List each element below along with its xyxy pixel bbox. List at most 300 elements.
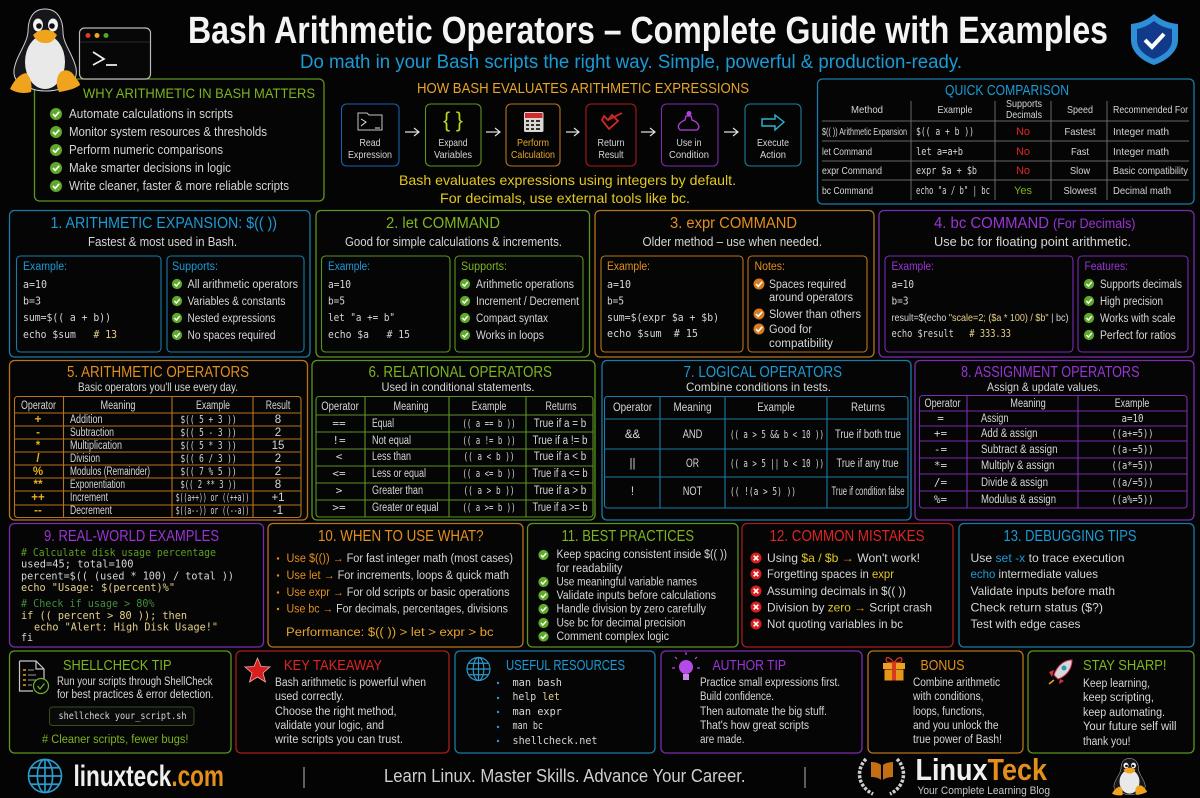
example box [322,256,450,352]
relational table: True if a <= b [532,468,588,480]
operators table: $(( 5 * 3 )) [180,439,236,452]
note: # Cleaner scripts, fewer bugs! [42,734,188,746]
operators table: - [36,427,40,439]
example box: let "a += b" [328,311,395,324]
brand tagline: Your Complete Learning Blog [918,785,1050,797]
step: execute action: Action [760,149,786,161]
supports box: No spaces required [188,330,276,342]
icon: checklist document [20,661,48,694]
operators table: 2 [275,427,281,439]
panel: 13 debugging tips [959,524,1194,647]
description [1083,678,1176,748]
heading: 6. RELATIONAL OPERATORS [368,364,552,381]
comparison table: Fast [1071,146,1089,158]
example box: b=5 [607,294,624,308]
example box: Example: [328,261,370,273]
mistakes list: Forgetting spaces in expr [767,567,894,581]
icon: footer globe [28,760,62,792]
checklist: Use bc for decimal precision [556,618,686,630]
subheading: Basic operators you'll use every day. [78,380,238,394]
heading: KEY TAKEAWAY [284,658,382,674]
description: Your future self will [1083,721,1176,733]
assignment table: Add & assign [981,428,1038,440]
notes box: around operators [769,292,853,304]
checklist [538,549,727,643]
tips list [970,551,1124,631]
example box: b=3 [892,294,908,308]
icon: footer penguin [1112,758,1147,795]
logical table: Example [757,402,795,414]
resource list [497,676,598,747]
supports box: Nested expressions [188,313,276,325]
example box: a=10 [328,278,351,291]
resource list: man bc [512,719,543,732]
features box: Supports decimals [1100,279,1182,291]
icon: gift [883,658,905,680]
comparison table: Integer math [1113,126,1169,138]
notes box: Notes: [754,261,785,273]
tips list: echo intermediate values [970,567,1098,581]
panel: 12 common mistakes [742,524,953,647]
logical table: True if condition false [832,486,904,498]
comparison table: No [1016,165,1030,177]
heading: 7. LOGICAL OPERATORS [684,364,842,381]
icon: terminal window [80,28,150,79]
example box [16,256,161,352]
code block: echo "Usage: $(percent)%" [21,581,175,594]
features box: High precision [1100,296,1163,308]
comparison table: Fastest [1064,126,1096,138]
checklist: Monitor system resources & thresholds [69,124,267,139]
example box: a=10 [23,278,47,291]
list [277,553,513,616]
comparison table: let a=a+b [916,146,963,158]
heading: 11. BEST PRACTICES [562,528,694,545]
description: for best practices & error detection. [57,689,214,701]
code block: used=45; total=100 [21,558,134,570]
heading: AUTHOR TIP [712,658,786,674]
heading: 4. bc COMMAND [934,215,1049,232]
relational table: True if a != b [532,435,588,447]
checklist: Make smarter decisions in logic [69,160,231,175]
relational table: True if a >= b [532,502,588,514]
icon: book and laurel [860,759,903,794]
logical table: (( !(a > 5) )) [730,485,796,498]
icon: linux penguin [10,9,80,93]
step: return result [586,104,636,166]
heading: 1. ARITHMETIC EXPANSION: $(( )) [50,215,277,232]
assignment table: Multiply & assign [981,460,1054,472]
heading: 5. ARITHMETIC OPERATORS [67,364,249,381]
note: For decimals, use external tools like bc. [440,190,690,206]
subheading: Assign & update values. [987,380,1101,394]
description [700,677,840,746]
description: validate your logic, and [275,720,384,732]
assignment table: *= [934,459,947,472]
comparison table: Supports [1006,98,1042,110]
checklist: Perform numeric comparisons [69,142,223,157]
relational table: Greater than [372,485,423,497]
brand name: LinuxTeck [916,752,1048,787]
example box: b=3 [23,294,41,308]
example box: b=5 [328,294,345,308]
checklist: Comment complex logic [556,631,669,643]
panel: why arithmetic matters [34,79,324,201]
assignment table: a=10 [1122,412,1144,425]
relational table: Less than [372,451,411,463]
comparison table: Decimal math [1113,185,1171,197]
comparison table: Speed [1067,104,1093,116]
mistakes list: Using $a / $b → Won't work! [767,551,920,565]
checklist [50,106,289,193]
operators table: $(( 2 ** 3 )) [180,478,236,491]
assignment table: /= [934,476,947,489]
example box: echo $result # 333.33 [892,327,1011,340]
assignment table: ((a-=5)) [1112,443,1154,456]
heading: WHY ARITHMETIC IN BASH MATTERS [83,85,315,101]
tips list: Test with edge cases [970,617,1080,631]
panel: 4 bc command [879,210,1194,357]
operators table: 2 [275,466,281,478]
step: return result: Return [598,137,625,149]
mistakes list [750,551,932,631]
assignment table: Operator [924,398,961,410]
checklist: for readability [556,563,623,575]
step: use in condition [662,104,718,166]
assignment table: Meaning [1010,398,1046,410]
checklist: Validate inputs before calculations [556,590,716,602]
step: use in condition: Use in [676,137,702,149]
heading: SHELLCHECK TIP [63,658,172,674]
supports box: Supports: [461,261,507,273]
supports box [167,256,304,352]
command box [50,707,194,726]
step: perform calculation: Perform [517,137,549,149]
features box: Features: [1084,261,1128,273]
relational table: Example [472,401,506,413]
site name: linuxteck.com [74,760,224,793]
relational table: (( a >= b )) [462,501,516,514]
list: Use $(()) → For fast integer math (most cases) [286,553,513,565]
mistakes list: Division by zero → Script crash [767,600,932,614]
operators table: Multiplication [70,440,122,452]
notes box: compatibility [769,338,833,350]
panel: key takeaway [236,651,449,753]
comparison table: No [1016,126,1030,138]
relational table: == [332,417,346,430]
assignment table: %= [934,493,947,506]
comparison table: expr $a + $b [916,165,977,177]
panel: 5 arithmetic operators [10,360,308,520]
code block: if (( percent > 80 )); then [21,609,187,622]
panel: 3 expr command [595,210,874,357]
list: Use bc → For decimals, percentages, divisions [286,604,508,616]
assignment table: = [937,412,944,425]
logical table: Returns [851,402,885,414]
step: use in condition: Condition [669,149,709,161]
step: return result: Result [598,149,624,161]
panel: shellcheck tip [10,651,231,753]
comparison table: Example [938,104,973,116]
relational table: Meaning [394,401,428,413]
notes box: Slower than others [769,309,861,321]
example box: result=$(echo "scale=2; ($a * 100) / $b" | bc) [892,312,1068,324]
panel: useful resources [455,651,655,753]
heading: STAY SHARP! [1083,658,1166,674]
panel: stay sharp [1028,651,1194,753]
relational table: Less or equal [372,468,426,480]
supports box: Arithmetic operations [476,279,574,291]
operators table: Modulos (Remainder) [70,466,150,478]
checklist: Use meaningful variable names [556,576,697,588]
operators table: 2 [275,453,281,465]
arrow [486,128,500,136]
panel: bonus [868,651,1023,753]
assignment table: ((a%=5)) [1112,493,1154,506]
panel: 2 let command [316,210,590,357]
assignment table: ((a+=5)) [1112,427,1154,440]
note [399,172,736,206]
checklist: Write cleaner, faster & more reliable scripts [69,178,289,193]
operators table: Division [70,453,100,465]
relational table: > [336,484,343,497]
logical table: OR [686,458,699,470]
relational table: True if a = b [534,418,586,430]
icon: shield [1131,14,1178,65]
assignment table: ((a/=5)) [1112,476,1154,489]
arrow [641,128,655,136]
example box: Example: [607,261,650,273]
heading: 12. COMMON MISTAKES [770,528,924,545]
heading [934,215,1136,232]
panel: 7 logical operators [602,360,911,520]
logical table: NOT [683,486,702,498]
performance line: Performance: $(( )) > let > expr > bc [286,627,494,639]
operators table: -- [34,505,42,517]
supports box: Variables & constants [188,296,286,308]
code block: # Calculate disk usage percentage [21,546,216,559]
operators table: 8 [275,414,281,426]
icon: light bulb [672,652,700,680]
operators table: Meaning [100,400,136,412]
comparison table: Slowest [1064,185,1097,197]
heading: 9. REAL-WORLD EXAMPLES [44,528,219,545]
subheading: Use bc for floating point arithmetic. [934,235,1131,249]
relational table: (( a != b )) [462,434,516,447]
icon: globe [467,658,490,680]
step: perform calculation: Calculation [511,149,555,161]
description: true power of Bash! [913,734,1002,746]
note: Bash evaluates expressions using integers by default. [399,172,736,188]
supports box: Compact syntax [476,313,548,325]
operators table: $(( 5 + 3 )) [180,413,236,426]
subheading: Used in conditional statements. [382,380,534,394]
description: loops, functions, [913,706,984,718]
arrow [405,128,419,136]
step: execute action [745,104,801,166]
operators table: $((a--)) or ((--a)) [176,504,249,517]
heading: 2. let COMMAND [386,215,500,232]
heading: HOW BASH EVALUATES ARITHMETIC EXPRESSIONS [417,80,749,97]
description: thank you! [1083,736,1130,748]
step: expand variables: { } [443,109,463,132]
operators table: % [33,466,43,478]
operators table: Addition [70,414,102,426]
relational table: Operator [321,401,359,413]
assignment table: += [934,427,947,440]
relational table: (( a <= b )) [462,467,516,480]
logical table: (( a > 5 && b < 10 )) [730,428,824,441]
relational table: True if a < b [534,451,586,463]
relational table [316,396,593,517]
panel: 10 when to use what [268,524,523,647]
panel: quick comparison [818,79,1194,204]
relational table: True if a > b [534,485,586,497]
step: expand variables: Variables [434,149,472,161]
logical table: Meaning [674,402,712,414]
comparison table: echo "a / b" | bc [916,185,990,197]
example box [601,256,743,352]
description: with conditions, [912,691,984,703]
comparison table: Yes [1014,185,1032,197]
subheading: Combine conditions in tests. [686,380,831,394]
relational table: (( a == b )) [462,417,516,430]
operators table: Increment [70,492,109,504]
description: Combine arithmetic [913,677,1000,689]
tips list: Validate inputs before math [970,584,1115,598]
assignment table [920,396,1187,508]
logical table: True if any true [836,458,898,470]
comparison table: Method [851,104,883,116]
arrow [724,128,738,136]
description [57,676,214,701]
comparison table: $(( a + b )) [916,126,974,138]
separator [303,767,305,788]
example box: echo $sum # 13 [23,328,117,341]
assignment table: Divide & assign [981,477,1048,489]
logical table: ! [631,486,634,498]
description: keep scripting, [1083,692,1154,704]
example box: a=10 [892,278,914,291]
comparison table: Integer math [1113,146,1169,158]
comparison table: No [1016,146,1030,158]
subheading: Older method – use when needed. [642,235,822,249]
step: expand variables [426,104,481,166]
description: are made. [700,734,744,746]
resource list: shellcheck.net [512,734,598,747]
mistakes list: Assuming decimals in $(( )) [767,584,906,598]
checklist: Automate calculations in scripts [69,106,233,121]
comparison table: Basic compatibility [1113,165,1189,177]
description: keep automating. [1083,707,1165,719]
logical table: Operator [613,402,652,414]
operators table: -1 [273,505,283,517]
relational table: >= [332,501,346,514]
operators table: 15 [272,440,284,452]
subheading: Good for simple calculations & increments. [345,235,562,249]
example box [885,256,1073,352]
supports box: Works in loops [476,330,544,342]
operators table: Result [266,400,291,412]
step: read expression: Read [360,137,381,149]
comparison table: let Command [822,146,872,158]
example box: sum=$(expr $a + $b) [607,311,719,324]
notes box: Spaces required [769,279,846,291]
comparison table: expr Command [822,165,882,177]
operators table: * [36,440,41,452]
description: Run your scripts through ShellCheck [57,676,213,688]
code block [21,546,234,644]
heading: 13. DEBUGGING TIPS [1004,528,1136,545]
list: Use let → For increments, loops & quick math [286,570,509,582]
features box [1078,256,1188,352]
resource list: man bash [512,676,562,689]
code block: echo "Alert: High Disk Usage!" [34,620,218,634]
example box: a=10 [607,278,631,291]
comparison table: bc Command [822,185,873,197]
icon: rocket [1049,660,1072,684]
heading: 3. expr COMMAND [670,215,797,232]
panel: 1 arithmetic expansion [10,210,310,357]
relational table: (( a > b )) [464,484,514,497]
relational table: Returns [546,401,577,413]
relational table: < [336,450,343,463]
relational table: Not equal [372,435,411,447]
footer [28,752,1147,797]
separator [804,767,806,788]
relational table: != [332,434,346,447]
comparison table: $(( )) Arithmetic Expansion [822,126,907,138]
list: Use expr → For old scripts or basic operations [286,587,510,599]
code block: fi [21,631,33,644]
step: perform calculation [506,104,560,166]
logical table: (( a > 5 || b < 10 )) [730,457,824,470]
supports box: Supports: [172,261,218,273]
heading: (For Decimals) [1053,216,1136,231]
assignment table: Modulus & assign [981,494,1056,506]
assignment table: Assign [981,413,1008,425]
description: Practice small expressions first. [700,677,840,689]
arrow [566,128,579,136]
operators table: $((a++)) or ((++a)) [176,491,249,504]
description: Then automate the big stuff. [700,706,827,718]
panel: 6 relational operators [312,360,595,520]
example box: echo $a # 15 [328,328,410,341]
description: Keep learning, [1083,678,1150,690]
operators table [14,396,301,518]
heading: QUICK COMPARISON [945,82,1069,99]
tagline: Learn Linux. Master Skills. Advance Your Career. [384,766,746,786]
logical table: AND [683,429,702,441]
tips list: Use set -x to trace execution [970,551,1124,565]
description: used correctly. [275,691,344,703]
description [274,677,426,746]
description: Build confidence. [700,691,774,703]
example box: Example: [892,261,934,273]
operators table: Exponentiation [70,479,125,491]
operators table: Example [196,400,230,412]
panel: author tip [661,651,862,753]
step: read expression [342,104,399,166]
heading: 10. WHEN TO USE WHAT? [318,528,484,545]
operators table: 8 [275,479,281,491]
operators table: / [36,453,40,465]
checklist: Keep spacing consistent inside $(( )) [556,549,727,561]
operators table: ++ [31,492,45,504]
step: expand variables: Expand [438,137,468,149]
checklist: Handle division by zero carefully [556,604,706,616]
comparison table [822,98,1189,200]
